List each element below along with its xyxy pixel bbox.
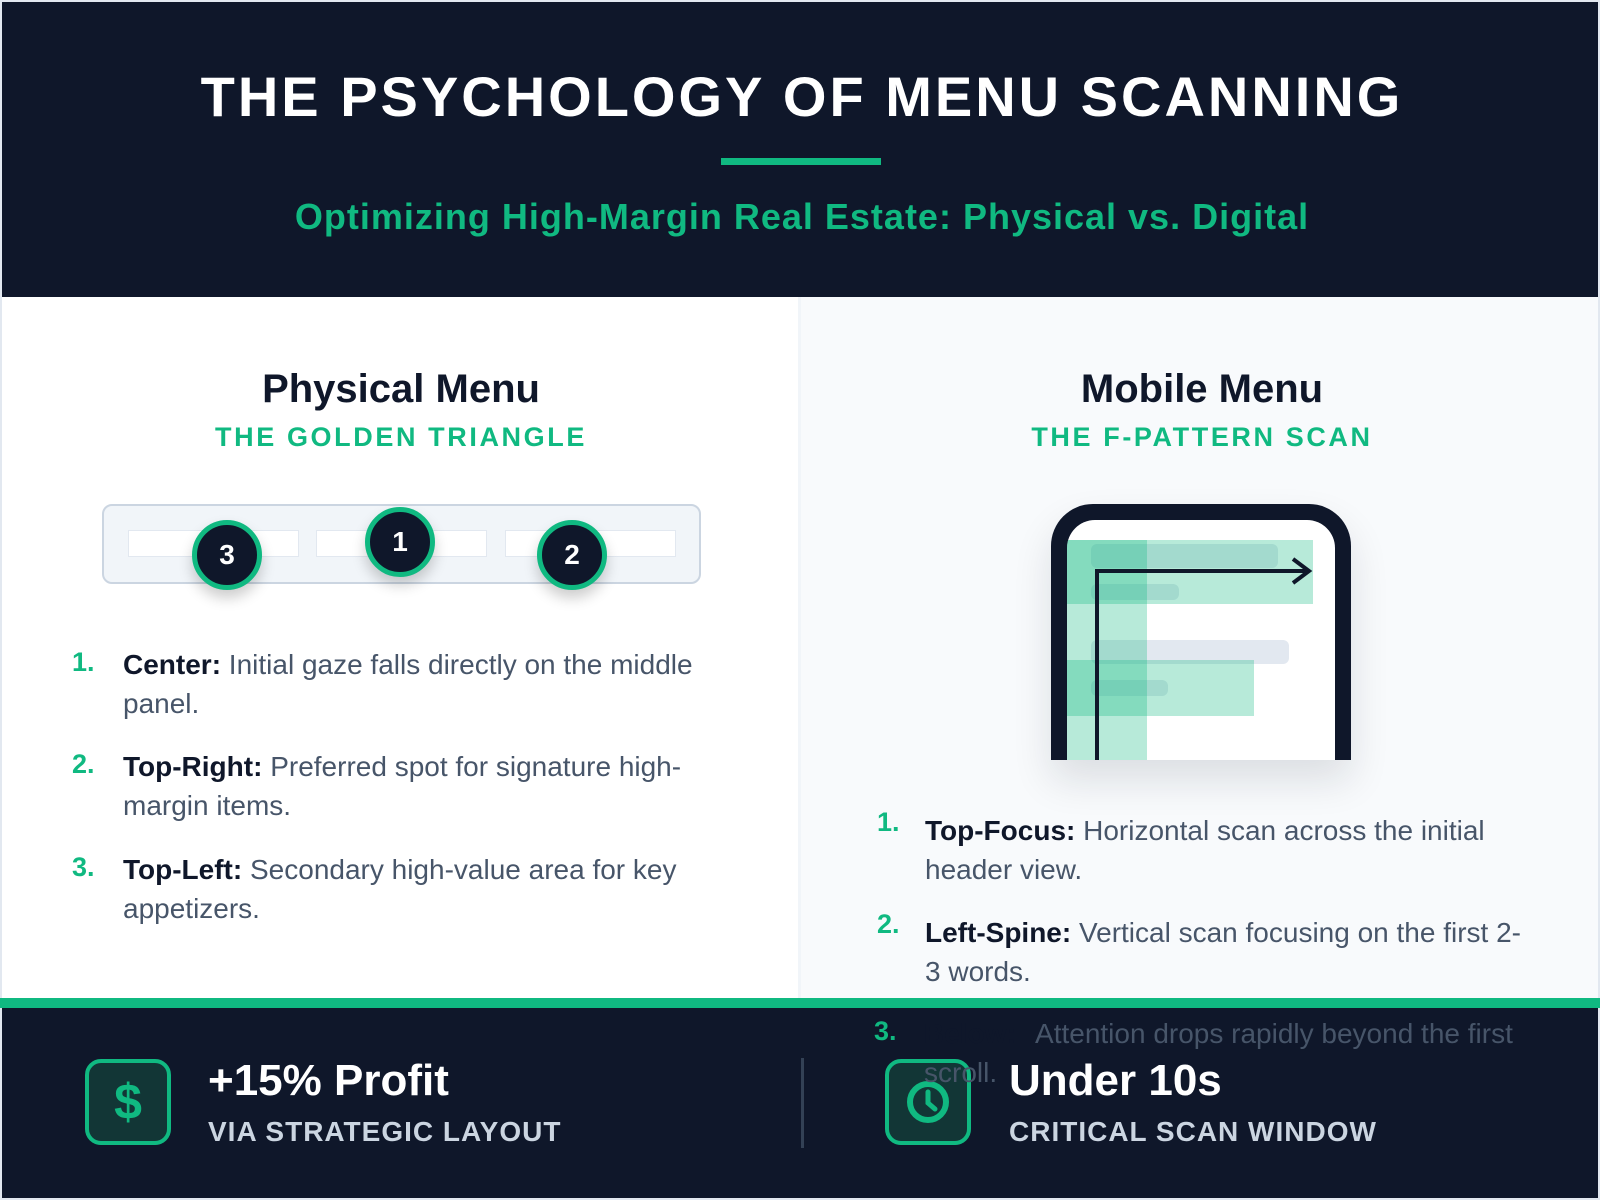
phone diagram (1051, 504, 1351, 760)
list: physical: Top-Right: Preferred spot for signature high-margin items. (123, 751, 681, 821)
marker 2 (537, 520, 607, 590)
marker 3: 3 (219, 539, 235, 570)
stat: scan time: Under 10s (1009, 1056, 1222, 1105)
list: physical: Center: Initial gaze falls directly on the middle panel. (123, 649, 693, 719)
accent bar (721, 158, 881, 165)
list: physical: 3. (72, 852, 95, 882)
list: physical: 1. (72, 647, 95, 677)
accent line (0, 998, 1600, 1008)
subheading: THE GOLDEN TRIANGLE (215, 422, 587, 452)
list: mobile: Left-Spine: Vertical scan focusing on the first 2-3 words. (925, 917, 1521, 987)
list: mobile (877, 807, 1521, 987)
menu diagram (102, 504, 701, 584)
footer (0, 1008, 1600, 1200)
header (0, 0, 1600, 297)
marker 3 (192, 520, 262, 590)
panel: physical menu (0, 297, 798, 999)
list: physical (72, 647, 693, 924)
list: mobile: 1. (877, 807, 900, 837)
panel: mobile menu (798, 297, 1600, 999)
icon: dollar (85, 1059, 171, 1145)
list: mobile: Top-Focus: Horizontal scan across the initial header view. (925, 815, 1485, 885)
list: mobile: 2. (877, 909, 900, 939)
stat: profit: +15% Profit (208, 1056, 449, 1105)
stat: scan time (885, 1056, 1377, 1147)
heading: Physical Menu (262, 367, 540, 411)
subtitle: Optimizing High-Margin Real Estate: Physical vs. Digital (295, 196, 1309, 237)
divider (801, 1058, 804, 1148)
stat: profit: VIA STRATEGIC LAYOUT (208, 1116, 561, 1147)
overflow item 3: 3. (874, 1016, 897, 1046)
marker 1 (365, 507, 435, 577)
stat: scan time: CRITICAL SCAN WINDOW (1009, 1116, 1377, 1147)
overflow item 3: Below: Attention drops rapidly beyond the first scroll. (924, 1018, 1513, 1088)
list: physical: Top-Left: Secondary high-value area for key appetizers. (123, 854, 676, 924)
heading: Mobile Menu (1081, 367, 1323, 411)
list: physical: 2. (72, 749, 95, 779)
marker 2: 2 (564, 539, 580, 570)
icon: clock (885, 1059, 971, 1145)
marker 1: 1 (392, 526, 408, 557)
stat: profit (85, 1056, 561, 1147)
icon: dollar: $ (114, 1074, 142, 1130)
subheading: THE F-PATTERN SCAN (1031, 422, 1373, 452)
title: THE PSYCHOLOGY OF MENU SCANNING (201, 65, 1403, 128)
